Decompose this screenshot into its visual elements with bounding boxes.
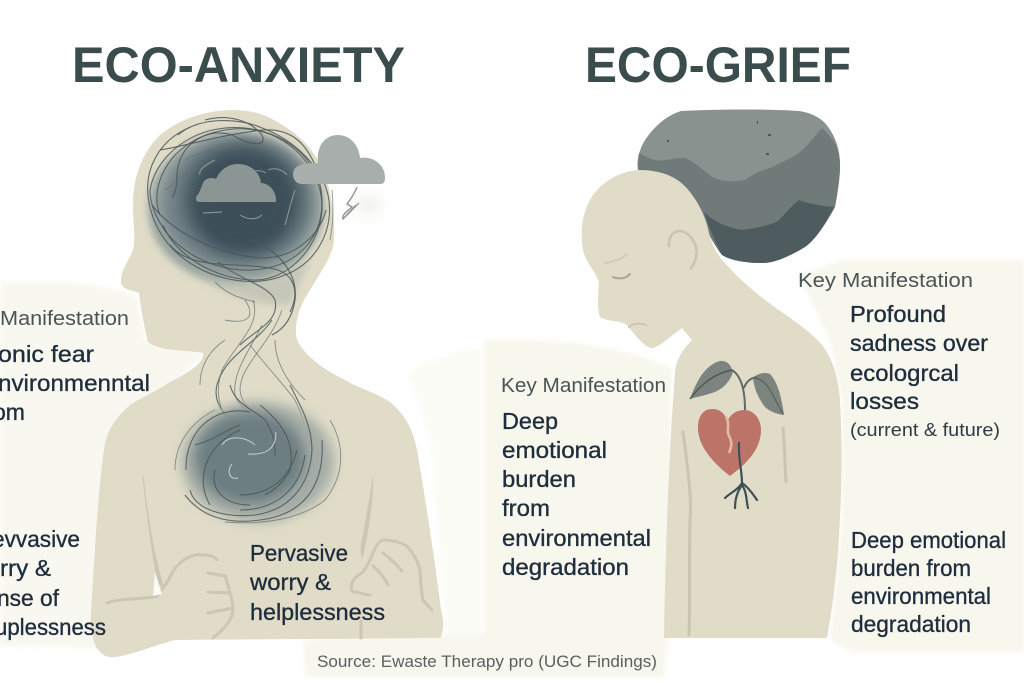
neck strands — [200, 300, 307, 460]
white gap by the left arm — [153, 572, 162, 596]
text block: right key manifestation: Profound — [850, 301, 946, 327]
panel: middle card faint left side — [408, 345, 483, 640]
boulder speckles — [667, 121, 771, 155]
panel: middle card and source strip — [303, 340, 672, 678]
swirl strokes — [175, 385, 341, 523]
closed eye and brow — [605, 255, 626, 263]
bowed silhouette — [582, 170, 842, 638]
text block: middle key manifestation: Key Manifestation — [501, 375, 666, 397]
heart — [698, 409, 761, 476]
text block: middle key manifestation: Deep — [502, 408, 558, 434]
text block: right key manifestation: (current & future) — [850, 420, 1000, 440]
text block: pervasive worry on body: worry & — [249, 569, 331, 595]
text block: pervasive worry on body — [249, 540, 385, 625]
mouth — [629, 324, 646, 327]
text block: right key manifestation: losses — [850, 388, 919, 414]
roots — [725, 443, 757, 508]
text block: right deep emotional burden: burden from — [851, 555, 971, 581]
icon: storm cloud outside head — [293, 135, 385, 219]
text block: left key manifestation — [0, 308, 150, 425]
text block: right key manifestation: sadness over — [850, 330, 988, 356]
label: Manifestation — [0, 308, 129, 330]
ear — [669, 231, 697, 268]
right leaf — [753, 373, 784, 415]
text block: left key manifestation: nvironmenntal — [0, 370, 150, 396]
light streaks in brain — [200, 160, 295, 225]
heart crack — [726, 417, 731, 453]
text block: right deep emotional burden — [851, 527, 1006, 637]
text block: right deep emotional burden: environmental — [851, 583, 991, 609]
cloud shadow — [354, 193, 382, 217]
left leaf — [690, 361, 733, 399]
panel: right manifestation card — [798, 260, 1024, 652]
text block: right key manifestation — [798, 270, 1000, 440]
icon: broken heart with sprout — [690, 361, 784, 508]
text block: right key manifestation: ecologrcal — [850, 360, 959, 386]
text block: middle key manifestation: degradation — [502, 554, 629, 580]
title: eco-anxiety: ECO-ANXIETY — [72, 37, 405, 93]
lightning bolt — [343, 187, 359, 219]
text block: middle key manifestation — [501, 375, 666, 580]
title: eco-grief: ECO-GRIEF — [585, 37, 851, 93]
text block: middle key manifestation: environmental — [502, 525, 651, 551]
figure: eco-grief person — [582, 170, 842, 638]
text block: middle key manifestation: from — [502, 495, 550, 521]
dark brain storm — [148, 132, 324, 305]
text block: middle key manifestation: burden — [502, 466, 576, 492]
chest swirl — [182, 402, 334, 522]
text block: clipped pervasive worry — [0, 526, 106, 640]
stem — [732, 370, 757, 410]
text block: pervasive worry on body: helplessness — [250, 599, 385, 625]
tangled scribble lines — [148, 118, 333, 345]
arm folds — [683, 432, 691, 635]
icon: heavy boulder — [637, 110, 840, 263]
boulder dark shade — [704, 200, 834, 263]
source line: Source: Ewaste Therapy pro (UGC Findings) — [317, 652, 657, 671]
text block: left key manifestation: onic fear — [0, 341, 94, 367]
body silhouette — [91, 110, 443, 657]
panel: left manifestation card — [0, 281, 205, 648]
figure: eco-anxiety person — [91, 110, 443, 657]
text block: clipped pervasive worry: rry & — [0, 555, 51, 581]
boulder mid shade — [638, 128, 840, 263]
text block: middle key manifestation: emotional — [502, 437, 607, 463]
text block: right deep emotional burden: degradation — [851, 611, 971, 637]
text block: right deep emotional burden: Deep emotional — [851, 527, 1006, 553]
text block: pervasive worry on body: Pervasive — [250, 540, 348, 566]
icon: cloud inside head — [196, 164, 276, 202]
text block: right key manifestation: Key Manifestation — [798, 270, 973, 292]
body folds and fists — [107, 476, 432, 638]
